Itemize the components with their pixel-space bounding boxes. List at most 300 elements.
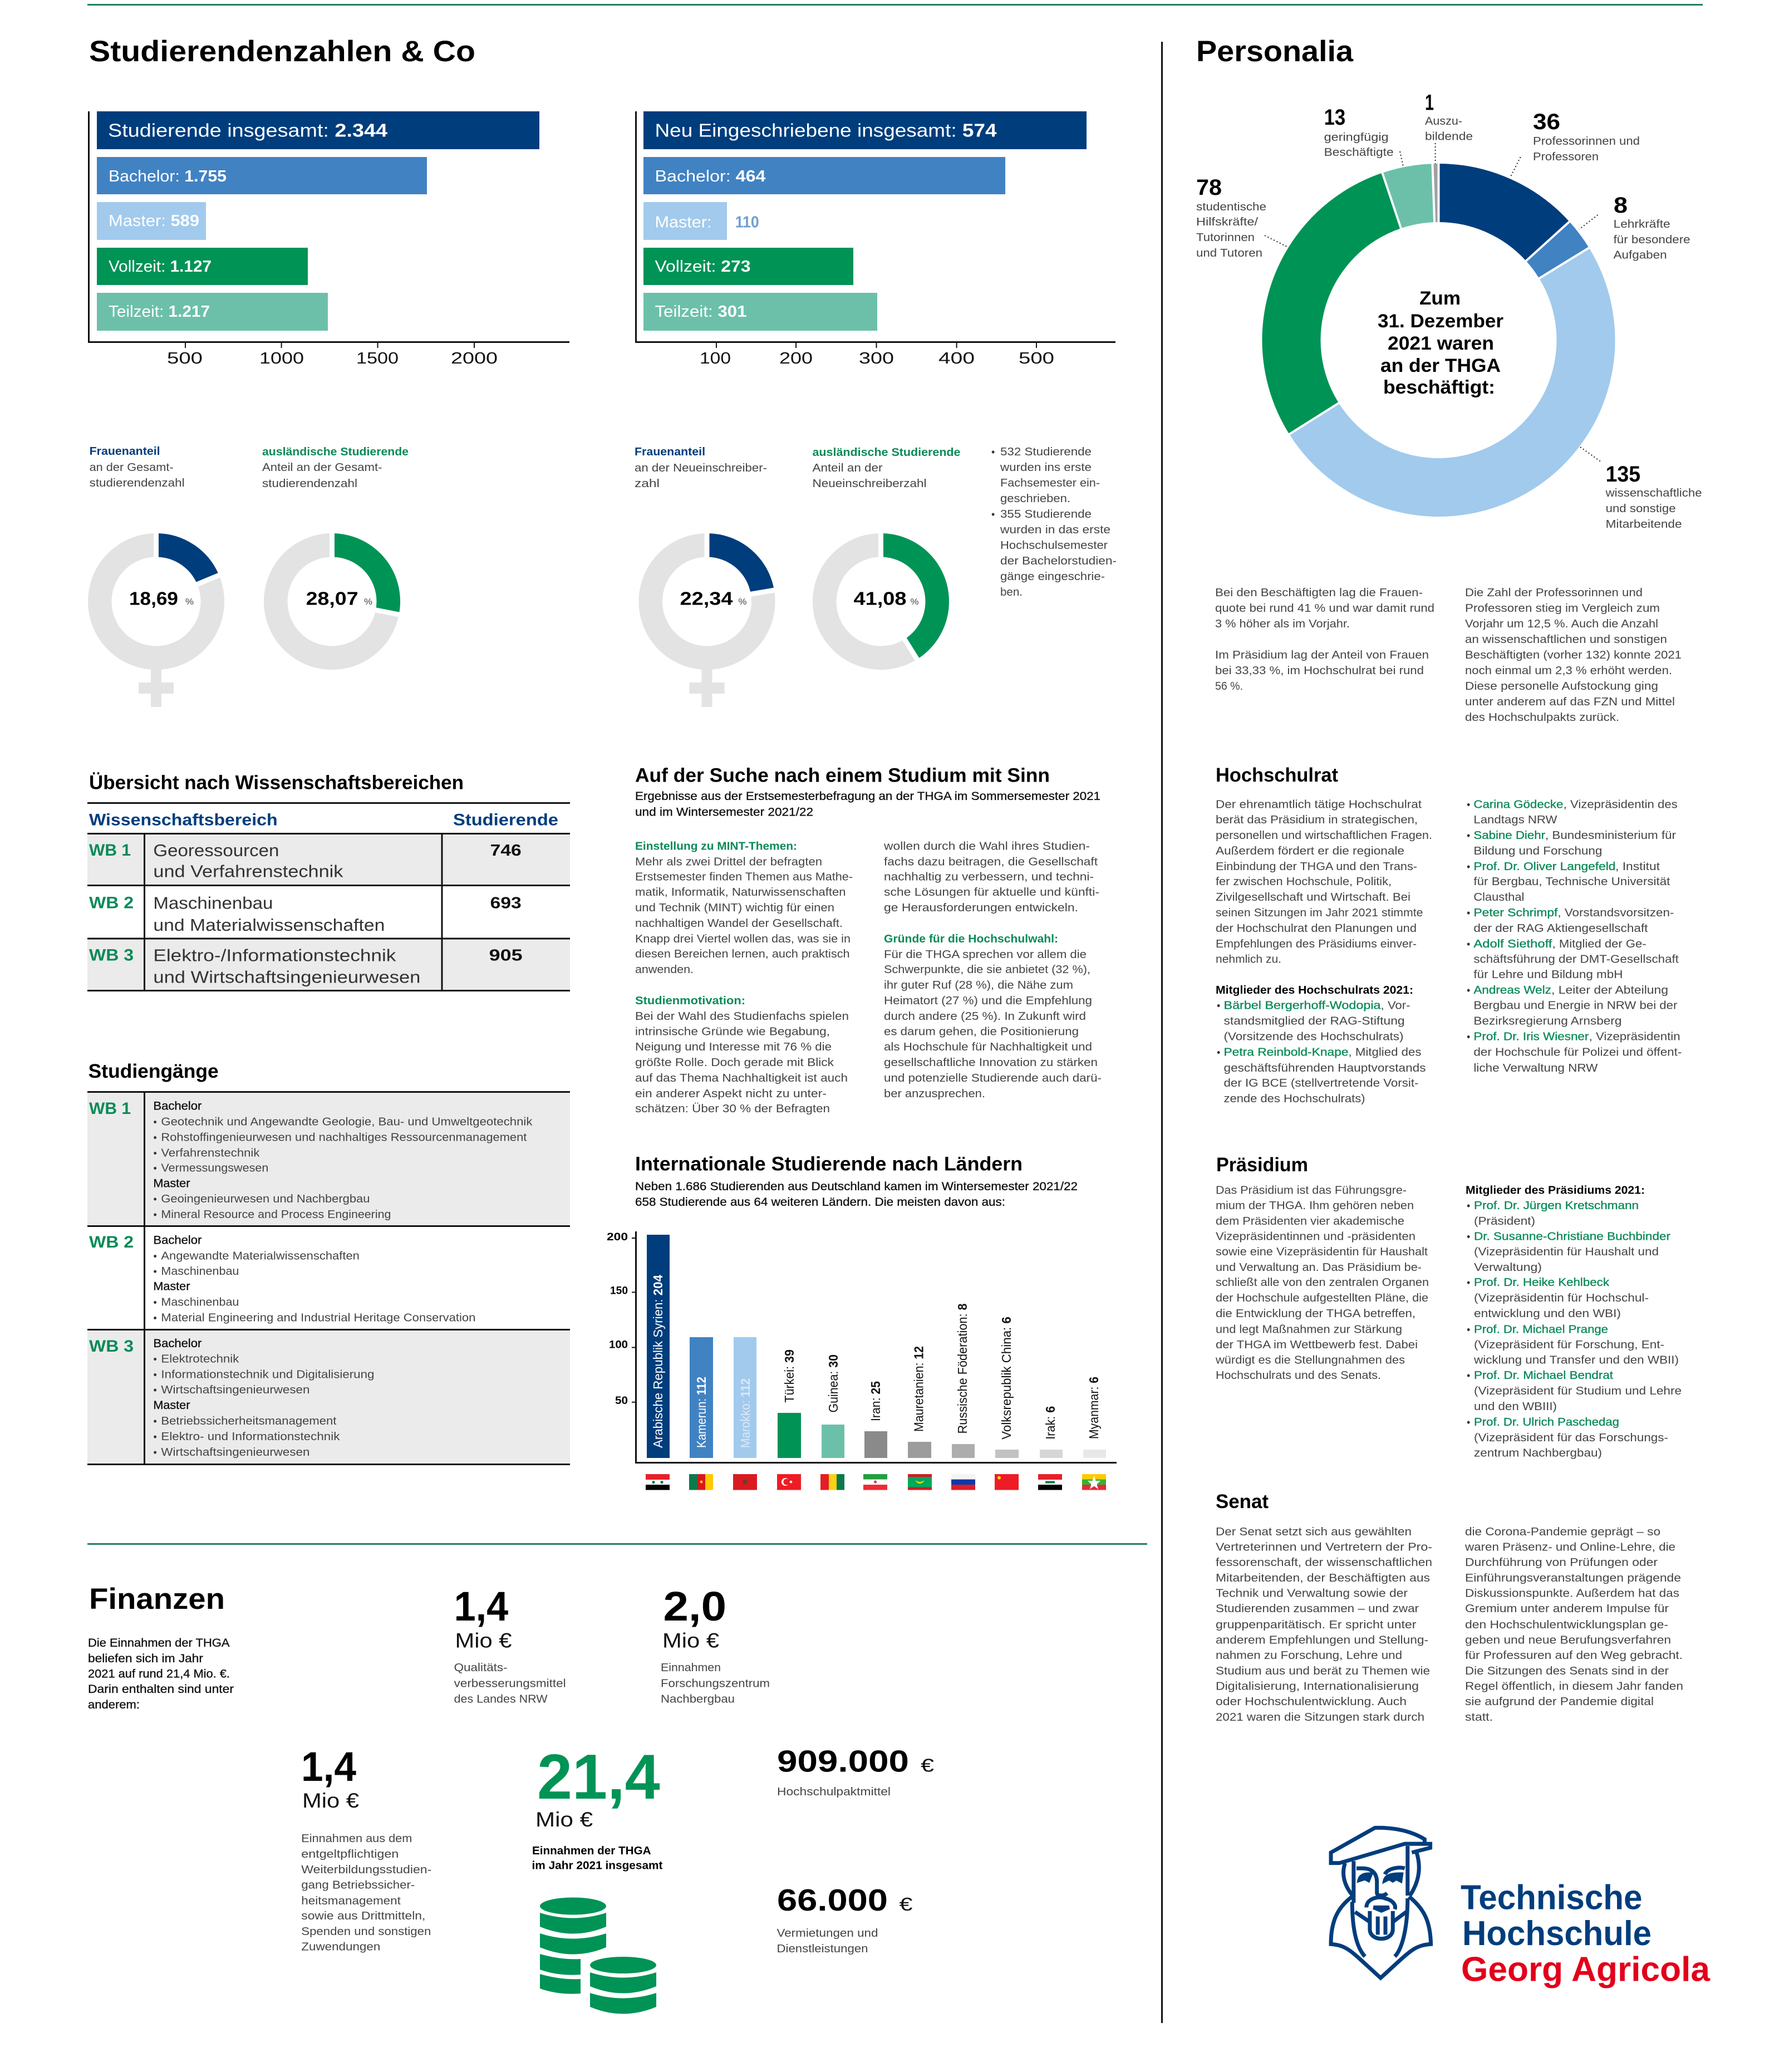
text column: Gründe für die Hochschulwahl: ihr guter Ruf (28 %), die Nähe zum <box>884 979 1073 991</box>
text block: Erstsemester notes: wurden in das erste <box>1000 523 1110 536</box>
panel: Übersicht nach Wissenschaftsbereichen: und Verfahrenstechnik <box>153 862 343 881</box>
panel: Studiengänge: Elektro- und Informationstechnik <box>161 1430 340 1443</box>
text block: Präsidium description: der Hochschule aufgestellten Pläne, die <box>1216 1292 1428 1304</box>
text block: Präsidium description: und legt Maßnahmen zur Stärkung <box>1216 1323 1402 1336</box>
label: 135 wissenschaftliche Mitarbeitende: 135 <box>1606 462 1640 487</box>
bar chart: Länder: Irak: 6 <box>1043 1406 1058 1440</box>
panel: Studiengänge: Bachelor <box>153 1234 201 1247</box>
bar chart: Länder: Mauretanien: 12 <box>912 1346 926 1432</box>
label: 8 Lehrkräfte: 8 <box>1614 193 1628 218</box>
panel: Übersicht nach Wissenschaftsbereichen: WB 1 <box>89 841 131 860</box>
text column: MINT und Studienmotivation: Studienmotivation: <box>635 994 745 1007</box>
text block: Präsidium description: sowie eine Vizepräsidentin für Haushalt <box>1216 1245 1428 1258</box>
text column: MINT und Studienmotivation: schätzen: Über 30 % der Befragten <box>635 1102 830 1115</box>
text block: Hochschulrat description and members: personellen und wirtschaftlichen Fragen. <box>1216 829 1432 842</box>
text column: Senat rechts: Diskussionspunkte. Außerdem hat das <box>1465 1587 1679 1600</box>
label: 13 geringfügig Beschäftigte: geringfügig <box>1324 131 1389 144</box>
stat: 909.000 €: Hochschulpaktmittel <box>777 1785 891 1798</box>
text block: Erstsemester notes: gänge eingeschrie- <box>1000 570 1105 583</box>
text block: Präsidium description: würdigt es die Stellungnahmen des <box>1215 1354 1405 1366</box>
list: Hochschulrat members: Sabine Diehr <box>1473 829 1545 842</box>
text column: Senat links: Digitalisierung, Internationalisierung <box>1216 1680 1419 1693</box>
text block: Hochschulrat description and members: zende des Hochschulrats) <box>1223 1092 1365 1105</box>
text block: Präsidium description: Hochschulrats und des Senats. <box>1216 1369 1381 1382</box>
text block: Hochschulrat description and members <box>1216 798 1432 1105</box>
list: Hochschulrat members: • <box>1467 799 1470 811</box>
text column: Senat links: gruppenparitätisch. Er spricht unter <box>1216 1618 1417 1631</box>
text column: Gründe für die Hochschulwahl: nachhaltig zu verbessern, und techni- <box>884 871 1094 883</box>
heading: Studiengänge: Studiengänge <box>89 1060 219 1082</box>
bar chart: Länder: Guinea: 30 <box>826 1354 841 1413</box>
list: Präsidium members: • <box>1467 1417 1470 1428</box>
list: Präsidium members: und den WBIII) <box>1474 1400 1557 1413</box>
stat: 66.000 €: € <box>900 1894 913 1914</box>
list: Präsidium members: • <box>1467 1324 1470 1335</box>
donut chart: Frauenanteil Gesamt 18,69 %: an der Gesamt- <box>90 461 174 474</box>
text column: Senat links: oder Hochschulentwicklung. Auch <box>1216 1695 1407 1708</box>
text column: MINT und Studienmotivation: und Technik (MINT) wichtig für einen <box>635 901 834 914</box>
text block: Hochschulrat description and members: der Hochschulrat den Planungen und <box>1216 922 1417 935</box>
text block: Professorinnen und Professoren: Vorjahr um 12,5 %. Auch die Anzahl <box>1465 617 1658 630</box>
text column: MINT und Studienmotivation: Neigung und Interesse mit 76 % die <box>635 1040 832 1053</box>
bar chart: Neu Eingeschriebene insgesamt: 500 <box>1019 350 1054 367</box>
label: 13 geringfügig Beschäftigte <box>1324 105 1394 159</box>
donut chart: ausländische Studierende Gesamt 28,07 %: ausländische Studierende <box>262 445 409 458</box>
text column: Senat links <box>1216 1525 1432 1724</box>
stat: 909.000 € <box>777 1744 934 1798</box>
bar chart: Länder: Russische Föderation: 8 <box>955 1303 970 1433</box>
donut chart: Beschäftigte: 2021 waren <box>1388 333 1494 354</box>
donut chart: ausländische Studierende Gesamt 28,07 %: 28,07 <box>306 588 358 609</box>
donut chart: Frauenanteil Neueinschreiber 22,34 %: 22,34 <box>680 588 733 609</box>
panel: Studiengänge: Master <box>153 1280 190 1293</box>
list: Hochschulrat members: • <box>1467 830 1470 841</box>
label: 135 wissenschaftliche Mitarbeitende: wissenschaftliche <box>1605 487 1702 499</box>
text block: Hochschulrat description and members: • <box>1217 1000 1220 1011</box>
bar chart: Länder: Marokko: 112 <box>738 1378 753 1448</box>
panel: Studiengänge: Material Engineering and Industrial Heritage Conservation <box>161 1312 475 1324</box>
text column: Senat rechts: für Professuren auf den Weg gebracht. <box>1465 1649 1683 1662</box>
text block: Präsidium description: der THGA im Wettbewerb fest. Dabei <box>1216 1338 1418 1351</box>
text block: Hochschulrat description and members: Außerdem fördert er die regionale <box>1216 844 1404 857</box>
stat: 2,0 Mio Forschungszentrum: Forschungszentrum <box>661 1677 770 1690</box>
label: 78 studentische Hilfskräfte: Tutorinnen <box>1196 231 1255 244</box>
text column: Senat rechts <box>1464 1525 1683 1724</box>
donut chart: ausländische Neueinschreiber 41,08 % <box>813 446 961 663</box>
bar chart: Neu Eingeschriebene insgesamt: Teilzeit: 301 <box>655 303 747 321</box>
text block: Präsidium description <box>1215 1184 1429 1382</box>
label: 78 studentische Hilfskräfte: Hilfskräfte/ <box>1196 215 1258 228</box>
text column: Senat links: Studierenden zusammen – und zwar <box>1216 1602 1419 1615</box>
panel: Studiengänge: Mineral Resource and Process Engineering <box>161 1208 391 1221</box>
text block: Hochschulrat description and members: standsmitglied der RAG-Stiftung <box>1223 1015 1405 1028</box>
bar chart: Länder: 150 <box>610 1285 628 1297</box>
list: Präsidium members: Prof. Dr. Jürgen Kretschmann <box>1474 1199 1639 1212</box>
icon: coin stacks <box>540 1897 656 2014</box>
list: Hochschulrat members: Andreas Welz <box>1473 984 1551 996</box>
label: 78 studentische Hilfskräfte <box>1196 175 1266 259</box>
panel: Studiengänge: • <box>154 1447 157 1458</box>
text column: Senat links: Der Senat setzt sich aus gewählten <box>1216 1525 1412 1538</box>
text block: Hochschulrat description and members: Empfehlungen des Präsidiums einver- <box>1216 937 1417 950</box>
text block: Frauenquote <box>1215 586 1434 693</box>
bar chart: Studierende insgesamt: Teilzeit: 1.217 <box>109 303 210 321</box>
text block: Präsidium description: mium der THGA. Ihm gehören neben <box>1216 1199 1414 1212</box>
text block: Erstsemester notes: Hochschulsemester <box>1000 539 1108 552</box>
panel: Studiengänge: • <box>154 1132 157 1143</box>
text block: Frauenquote: quote bei rund 41 % und war damit rund <box>1215 602 1434 615</box>
panel: Studiengänge: Verfahrenstechnik <box>161 1147 260 1159</box>
stat: 1,4 Mio Weiterbildung: Mio € <box>302 1789 359 1812</box>
panel: Studiengänge: • <box>154 1384 157 1396</box>
panel: Studiengänge: • <box>154 1209 157 1220</box>
panel: Studiengänge: Betriebssicherheitsmanagement <box>161 1415 337 1427</box>
donut chart: ausländische Neueinschreiber 41,08 %: % <box>911 597 918 607</box>
icon: flag Syrien <box>646 1474 670 1490</box>
list: Hochschulrat members: liche Verwaltung NRW <box>1473 1062 1598 1074</box>
donut chart: ausländische Studierende Gesamt 28,07 %: Anteil an der Gesamt- <box>262 461 382 474</box>
panel: Studiengänge: • <box>154 1163 157 1174</box>
bar chart: Studierende insgesamt: 2000 <box>451 350 498 367</box>
list: Präsidium members: Prof. Dr. Michael Prange <box>1474 1323 1608 1336</box>
panel: Studiengänge: • <box>154 1117 157 1128</box>
text column: Gründe für die Hochschulwahl: ber anzusprechen. <box>884 1087 985 1100</box>
bar chart: Neu Eingeschriebene insgesamt: Vollzeit: 273 <box>655 258 750 276</box>
text block: Erstsemester notes: wurden ins erste <box>1000 461 1092 474</box>
list: Hochschulrat members: Peter Schrimpf <box>1473 906 1558 919</box>
panel: Übersicht nach Wissenschaftsbereichen: 746 <box>490 842 522 860</box>
panel: Übersicht nach Wissenschaftsbereichen: 905 <box>489 946 523 964</box>
stat: 909.000 €: 909.000 <box>777 1744 909 1778</box>
list: Präsidium members: Prof. Dr. Heike Kehlbeck <box>1474 1276 1610 1289</box>
icon: flag Guinea <box>820 1474 844 1490</box>
text column: Senat links: Mitarbeitenden, der Beschäftigten aus <box>1216 1572 1430 1584</box>
stat: 1,4 Mio Weiterbildung: entgeltpflichtigen <box>301 1848 399 1860</box>
donut chart: Frauenanteil Gesamt 18,69 % <box>90 445 223 707</box>
stat: 66.000 € <box>777 1883 913 1955</box>
text column: Senat rechts: Die Sitzungen des Senats sind in der <box>1465 1665 1669 1677</box>
text block: Erstsemester notes: • <box>991 446 995 458</box>
list: Präsidium members <box>1466 1184 1682 1460</box>
text block: Präsidium description: dem Präsidenten vier akademische <box>1216 1215 1404 1228</box>
stat: 1,4 Mio Qualitätsverbesserungsmittel: Mio € <box>455 1629 512 1652</box>
panel: Studiengänge: Geotechnik und Angewandte Geologie, Bau- und Umweltgeotechnik <box>161 1116 533 1128</box>
text block: Professorinnen und Professoren: des Hochschulpakts zurück. <box>1465 711 1619 724</box>
panel: Auf der Suche nach einem Studium mit Sinn: und im Wintersemester 2021/22 <box>635 806 813 818</box>
text column: Gründe für die Hochschulwahl: und potenzielle Studierende auch darü- <box>884 1072 1102 1084</box>
label: 78 studentische Hilfskräfte: 78 <box>1196 175 1222 200</box>
stat: 1,4 Mio Qualitätsverbesserungsmittel: Qualitäts- <box>454 1661 508 1674</box>
donut chart: Frauenanteil Neueinschreiber 22,34 % <box>635 445 779 707</box>
text column: Senat links: Studium aus und berät zu Themen wie <box>1216 1665 1430 1677</box>
bar chart: Neu Eingeschriebene insgesamt: 200 <box>779 350 813 367</box>
text column: Senat links: nahmen zu Forschung, Lehre und <box>1216 1649 1402 1662</box>
text block: Erstsemester notes: ben. <box>1000 586 1023 598</box>
panel: Finanzen <box>87 1543 1147 2014</box>
list: Hochschulrat members: • <box>1467 985 1470 996</box>
stat: 1,4 Mio Weiterbildung: gang Betriebssicher- <box>301 1879 415 1892</box>
text block: Professorinnen und Professoren: Die Zahl der Professorinnen und <box>1465 586 1643 599</box>
stat: 1,4 Mio Weiterbildung: Weiterbildungsstudien- <box>301 1863 431 1876</box>
list: Hochschulrat members: • <box>1467 861 1470 872</box>
list: Hochschulrat members: für Lehre und Bildung mbH <box>1473 968 1623 981</box>
donut chart: ausländische Studierende Gesamt 28,07 %: studierendenzahl <box>262 477 357 490</box>
heading: Personalia: Personalia <box>1196 35 1354 68</box>
text column: MINT und Studienmotivation: nachhaltigen Wandel der Gesellschaft. <box>635 917 843 930</box>
stat: 21,4 Mio Gesamt: 21,4 <box>537 1742 660 1813</box>
donut chart: Beschäftigte: beschäftigt: <box>1383 377 1495 398</box>
donut chart: Frauenanteil Neueinschreiber 22,34 %: zahl <box>635 477 660 490</box>
list: Präsidium members: entwicklung und den WBI) <box>1474 1307 1621 1320</box>
heading: Senat: Senat <box>1216 1491 1269 1513</box>
stat: 1,4 Mio Weiterbildung: Spenden und sonstigen <box>301 1925 431 1938</box>
panel: Studiengänge <box>87 1060 570 1465</box>
text column: Gründe für die Hochschulwahl: Für die THGA sprechen vor allem die <box>884 948 1087 961</box>
text block: Hochschulrat description and members: (Vorsitzende des Hochschulrats) <box>1223 1030 1404 1043</box>
text column: Gründe für die Hochschulwahl: Schwerpunkte, die sie anbietet (32 %), <box>884 963 1090 976</box>
bar chart: Neu Eingeschriebene insgesamt: 400 <box>938 350 975 367</box>
text block: Einnahmen intro: beliefen sich im Jahr <box>88 1652 203 1665</box>
icon: flag Myanmar <box>1082 1474 1106 1490</box>
icon: flag Russland <box>951 1474 975 1490</box>
text block: Professorinnen und Professoren: Diese personelle Aufstockung ging <box>1465 680 1658 693</box>
donut chart: Frauenanteil Gesamt 18,69 %: % <box>185 597 194 607</box>
panel: Studiengänge: Geoingenieurwesen und Nachbergbau <box>161 1192 370 1205</box>
icon: flag Irak <box>1038 1474 1062 1490</box>
list: Hochschulrat members: , Vizepräsidentin des <box>1564 798 1678 811</box>
panel: Studiengänge: Angewandte Materialwissenschaften <box>161 1250 360 1263</box>
stat: 909.000 €: € <box>921 1755 934 1776</box>
text block: Professorinnen und Professoren: unter anderem auf das FZN und Mittel <box>1465 695 1675 708</box>
stat: 1,4 Mio Qualitätsverbesserungsmittel: 1,4 <box>454 1583 508 1629</box>
label: 78 studentische Hilfskräfte: und Tutoren <box>1196 247 1262 259</box>
label: 135 wissenschaftliche Mitarbeitende: Mitarbeitende <box>1606 518 1682 531</box>
bar chart: Studierende insgesamt: Master: 589 <box>109 212 199 230</box>
text column: Senat links: fessorenschaft, der wissenschaftlichen <box>1216 1556 1432 1569</box>
text block: Erstsemester notes: • <box>991 509 995 520</box>
icon: flag Marokko <box>733 1474 757 1490</box>
donut chart: Frauenanteil Neueinschreiber 22,34 %: an der Neueinschreiber- <box>635 461 767 474</box>
logo: Technische Hochschule Georg Agricola <box>1331 1828 1711 1988</box>
text column: Senat rechts: die Corona-Pandemie geprägt – so <box>1465 1525 1660 1538</box>
stat: 1,4 Mio Weiterbildung: heitsmanagement <box>301 1894 401 1907</box>
text block: Professorinnen und Professoren <box>1465 586 1682 724</box>
label: 36 Professorinnen und Professoren <box>1533 110 1640 163</box>
panel: Studiengänge: • <box>154 1354 157 1365</box>
text block: Hochschulrat description and members: Der ehrenamtlich tätige Hochschulrat <box>1216 798 1422 811</box>
text column: Gründe für die Hochschulwahl: Heimatort (27 %) und die Empfehlung <box>884 994 1092 1007</box>
list: Hochschulrat members: • <box>1467 1031 1470 1042</box>
list: Hochschulrat members: • <box>1467 939 1470 950</box>
text block: Hochschulrat description and members: Einbindung der THGA und den Trans- <box>1216 860 1417 873</box>
text column: Senat rechts: Regel öffentlich, in diesem Jahr fanden <box>1465 1680 1683 1693</box>
list: Präsidium members: zentrum Nachbergbau) <box>1474 1446 1602 1460</box>
text column: Senat rechts: Einführungsveranstaltungen prägende <box>1465 1572 1681 1584</box>
stat: 2,0 Mio Forschungszentrum: Mio € <box>662 1629 719 1652</box>
label: 8 Lehrkräfte: Aufgaben <box>1614 249 1667 262</box>
text block: Hochschulrat description and members: Bärbel Bergerhoff-Wodopia <box>1223 999 1381 1012</box>
bar chart: Länder: 100 <box>609 1339 628 1351</box>
text block: Einnahmen intro: Die Einnahmen der THGA <box>88 1637 229 1649</box>
list: Hochschulrat members: der der RAG Aktiengesellschaft <box>1473 922 1648 935</box>
text column: MINT und Studienmotivation: diesen Bereichen lernen, auch praktisch <box>635 947 850 960</box>
title: Studierendenzahlen & Co: Studierendenzahlen & Co <box>89 35 475 68</box>
list: Präsidium members: (Vizepräsidentin für Hochschul- <box>1474 1292 1649 1304</box>
label: 13 geringfügig Beschäftigte: Beschäftigte <box>1324 146 1394 159</box>
list: Hochschulrat members: , Leiter der Abteilung <box>1551 984 1668 996</box>
label: 78 studentische Hilfskräfte: studentische <box>1196 200 1266 213</box>
list: Präsidium members: • <box>1467 1277 1470 1288</box>
panel: Übersicht nach Wissenschaftsbereichen: Elektro-/Informationstechnik <box>153 945 396 965</box>
panel: Studiengänge: • <box>154 1297 157 1308</box>
stat: 2,0 Mio Forschungszentrum: Nachbergbau <box>661 1693 735 1706</box>
list: Hochschulrat members <box>1467 798 1682 1074</box>
panel: Senat <box>1216 1491 1683 1724</box>
list: Präsidium members: Verwaltung) <box>1474 1261 1542 1274</box>
label: 36 Professorinnen und Professoren: 36 <box>1533 110 1560 134</box>
text column: MINT und Studienmotivation: Bei der Wahl des Studienfachs spielen <box>635 1010 849 1023</box>
text block: Hochschulrat description and members: • <box>1217 1047 1220 1058</box>
icon: flag Türkei <box>777 1474 801 1490</box>
icon: flag Mauretanien <box>908 1474 932 1490</box>
text block: Präsidium description: Das Präsidium ist das Führungsgre- <box>1216 1184 1407 1197</box>
panel: Übersicht nach Wissenschaftsbereichen: Georessourcen <box>153 841 279 860</box>
panel: Studiengänge: Wirtschaftsingenieurwesen <box>161 1446 309 1459</box>
stat: 66.000 €: Dienstleistungen <box>777 1942 868 1955</box>
panel: Studiengänge: Bachelor <box>153 1337 201 1350</box>
stat: 21,4 Mio Gesamt: im Jahr 2021 insgesamt <box>532 1859 663 1872</box>
heading: Übersicht: Übersicht nach Wissenschaftsbereichen <box>89 772 464 794</box>
panel: Studiengänge: Master <box>153 1399 190 1412</box>
text column: Senat links: 2021 waren die Sitzungen stark durch <box>1216 1711 1424 1724</box>
text column: MINT und Studienmotivation: anwenden. <box>635 963 694 976</box>
stat: 1,4 Mio Weiterbildung: Einnahmen aus dem <box>301 1832 412 1845</box>
panel: Studiengänge: Rohstoffingenieurwesen und nachhaltiges Ressourcenmanagement <box>161 1131 527 1144</box>
bar chart: Länder: Türkei: 39 <box>782 1349 797 1403</box>
bar chart: Studierende insgesamt: Vollzeit: 1.127 <box>109 258 212 276</box>
text block: Frauenquote: 56 %. <box>1215 680 1243 693</box>
stat: 1,4 Mio Weiterbildung <box>301 1744 431 1953</box>
panel: Studiengänge: Master <box>153 1177 190 1190</box>
bar chart: Studierende insgesamt: 500 <box>167 350 203 367</box>
stat: 1,4 Mio Weiterbildung: 1,4 <box>301 1744 356 1790</box>
text column: MINT und Studienmotivation: größte Rolle. Doch gerade mit Blick <box>635 1056 834 1069</box>
bar chart: Länder: Iran: 25 <box>868 1381 883 1421</box>
panel: Studiengänge: • <box>154 1416 157 1427</box>
text block: Hochschulrat description and members: Zivilgesellschaft und Wirtschaft. Bei <box>1216 891 1410 904</box>
text block: Erstsemester notes: geschrieben. <box>1000 492 1070 505</box>
label: 1 Auszubildende <box>1425 90 1473 143</box>
label: 135 wissenschaftliche Mitarbeitende <box>1605 462 1702 531</box>
text block: Professorinnen und Professoren: an wissenschaftlichen und sonstigen <box>1465 633 1667 646</box>
panel: Studiengänge: WB 1 <box>89 1099 131 1118</box>
stat: 1,4 Mio Weiterbildung: sowie aus Drittmitteln, <box>301 1909 425 1922</box>
panel: Studiengänge: • <box>154 1369 157 1381</box>
text column: MINT und Studienmotivation: matik, Informatik, Naturwissenschaften <box>635 886 846 898</box>
list: Präsidium members: (Vizepräsidentin für Haushalt und <box>1474 1245 1659 1258</box>
stat: 21,4 Mio Gesamt: Einnahmen der THGA <box>532 1844 651 1857</box>
text column: MINT und Studienmotivation: Mehr als zwei Drittel der befragten <box>635 855 822 868</box>
heading: Hochschulrat: Hochschulrat <box>1216 764 1338 786</box>
panel: Personalia <box>1196 35 1702 724</box>
text column: Gründe für die Hochschulwahl: als Hochschule für Nachhaltigkeit und <box>884 1040 1092 1053</box>
label: 36 Professorinnen und Professoren: Professorinnen und <box>1533 135 1640 148</box>
bar chart: Neu Eingeschriebene insgesamt: Bachelor: 464 <box>655 168 766 185</box>
panel: Studiengänge: Vermessungswesen <box>161 1162 268 1175</box>
text block: Hochschulrat description and members: Petra Reinbold-Knape <box>1223 1046 1348 1059</box>
text block: Hochschulrat description and members: der IG BCE (stellvertretende Vorsit- <box>1223 1077 1418 1089</box>
text block: Erstsemester notes: der Bachelorstudien- <box>1000 554 1117 567</box>
panel: Studiengänge: Bachelor <box>153 1100 201 1113</box>
bar chart: Neu Eingeschriebene insgesamt: Master: <box>655 214 711 232</box>
list: Präsidium members: wicklung und Transfer und den WBII) <box>1473 1354 1679 1366</box>
donut chart: ausländische Neueinschreiber 41,08 %: ausländische Studierende <box>813 446 961 459</box>
bar chart: Neu Eingeschriebene insgesamt: 100 <box>700 350 731 367</box>
text block: Präsidium description: Vizepräsidentinnen und -präsidenten <box>1216 1230 1416 1243</box>
text block: Hochschulrat description and members: , Vor- <box>1380 999 1410 1012</box>
label: 1 Auszubildende: 1 <box>1425 90 1434 115</box>
donut chart: Frauenanteil Neueinschreiber 22,34 %: Frauenanteil <box>635 445 705 458</box>
icon: flag Iran <box>863 1474 887 1490</box>
donut chart: ausländische Studierende Gesamt 28,07 % <box>262 445 409 658</box>
text column: Senat links: anderem Empfehlungen und Stellung- <box>1216 1633 1428 1647</box>
text block: Präsidium description: die Entwicklung der THGA betreffen, <box>1216 1307 1416 1320</box>
text block: Hochschulrat description and members: berät das Präsidium in strategischen, <box>1216 813 1418 826</box>
text block: Präsidium description: schließt alle von den zentralen Organen <box>1216 1276 1429 1289</box>
donut chart: Frauenanteil Gesamt 18,69 %: 18,69 <box>129 588 178 609</box>
donut chart: ausländische Neueinschreiber 41,08 %: Neueinschreiberzahl <box>813 477 926 490</box>
panel: Übersicht nach Wissenschaftsbereichen <box>87 772 570 991</box>
panel: Studiengänge: • <box>154 1431 157 1442</box>
icon: Agricola portrait <box>1331 1828 1431 1978</box>
text column: Senat rechts: Gremium unter anderem Impulse für <box>1465 1602 1669 1615</box>
text column: Gründe für die Hochschulwahl: fachs dazu beitragen, die Gesellschaft <box>884 855 1098 868</box>
text block: Professorinnen und Professoren: Professoren stieg im Vergleich zum <box>1465 602 1660 615</box>
text column: Senat rechts: waren Präsenz- und Online-Lehre, die <box>1464 1541 1675 1553</box>
text block: Hochschulrat description and members: Mitglieder des Hochschulrats 2021: <box>1216 984 1413 996</box>
list: Präsidium members: • <box>1467 1231 1470 1243</box>
panel: Internationale Studierende nach Ländern: 658 Studierende aus 64 weiteren Ländern. Die meisten davon aus: <box>635 1196 1005 1209</box>
heading: Präsidium: Präsidium <box>1216 1154 1308 1176</box>
text block: Frauenquote: 3 % höher als im Vorjahr. <box>1215 617 1350 630</box>
panel: Studiengänge: Maschinenbau <box>161 1296 239 1309</box>
text column: Gründe für die Hochschulwahl: gesellschaftliche Innovation zu stärken <box>884 1056 1098 1069</box>
text block: Einnahmen intro: Darin enthalten sind unter <box>88 1683 234 1696</box>
stat: 1,4 Mio Qualitätsverbesserungsmittel: des Landes NRW <box>454 1693 548 1706</box>
stat: 21,4 Mio Gesamt: Mio € <box>535 1808 593 1831</box>
text column: Gründe für die Hochschulwahl: Gründe für die Hochschulwahl: <box>884 932 1058 945</box>
panel: Studiengänge: Informationstechnik und Digitalisierung <box>161 1368 374 1381</box>
donut chart: Frauenanteil Gesamt 18,69 %: Frauenanteil <box>90 445 160 458</box>
list: Hochschulrat members: der Hochschule für Polizei und öffent- <box>1473 1046 1682 1059</box>
donut chart: ausländische Neueinschreiber 41,08 %: Anteil an der <box>813 461 883 474</box>
list: Hochschulrat members: , Vorstandsvorsitzen- <box>1557 906 1674 919</box>
donut chart: Beschäftigte: Zum <box>1419 288 1461 309</box>
icon: flag Kamerun <box>689 1474 713 1490</box>
list: Hochschulrat members: • <box>1467 907 1470 919</box>
list: Präsidium members: Mitglieder des Präsidiums 2021: <box>1466 1184 1645 1197</box>
text column: Senat links: Technik und Verwaltung sowie der <box>1216 1587 1408 1600</box>
text block: Professorinnen und Professoren: Beschäftigten (vorher 132) konnte 2021 <box>1465 649 1682 661</box>
donut chart: Beschäftigte: an der THGA <box>1380 355 1501 376</box>
panel: Studiengänge: • <box>154 1148 157 1159</box>
stat: 1,4 Mio Qualitätsverbesserungsmittel <box>454 1583 566 1706</box>
text column: Gründe für die Hochschulwahl <box>883 840 1102 1100</box>
text column: MINT und Studienmotivation: auf das Thema Nachhaltigkeit ist auch <box>635 1072 848 1084</box>
list: Hochschulrat members: für Bergbau, Technische Universität <box>1473 875 1670 888</box>
label: 8 Lehrkräfte <box>1614 193 1690 262</box>
text: Technische: Technische <box>1461 1878 1642 1917</box>
